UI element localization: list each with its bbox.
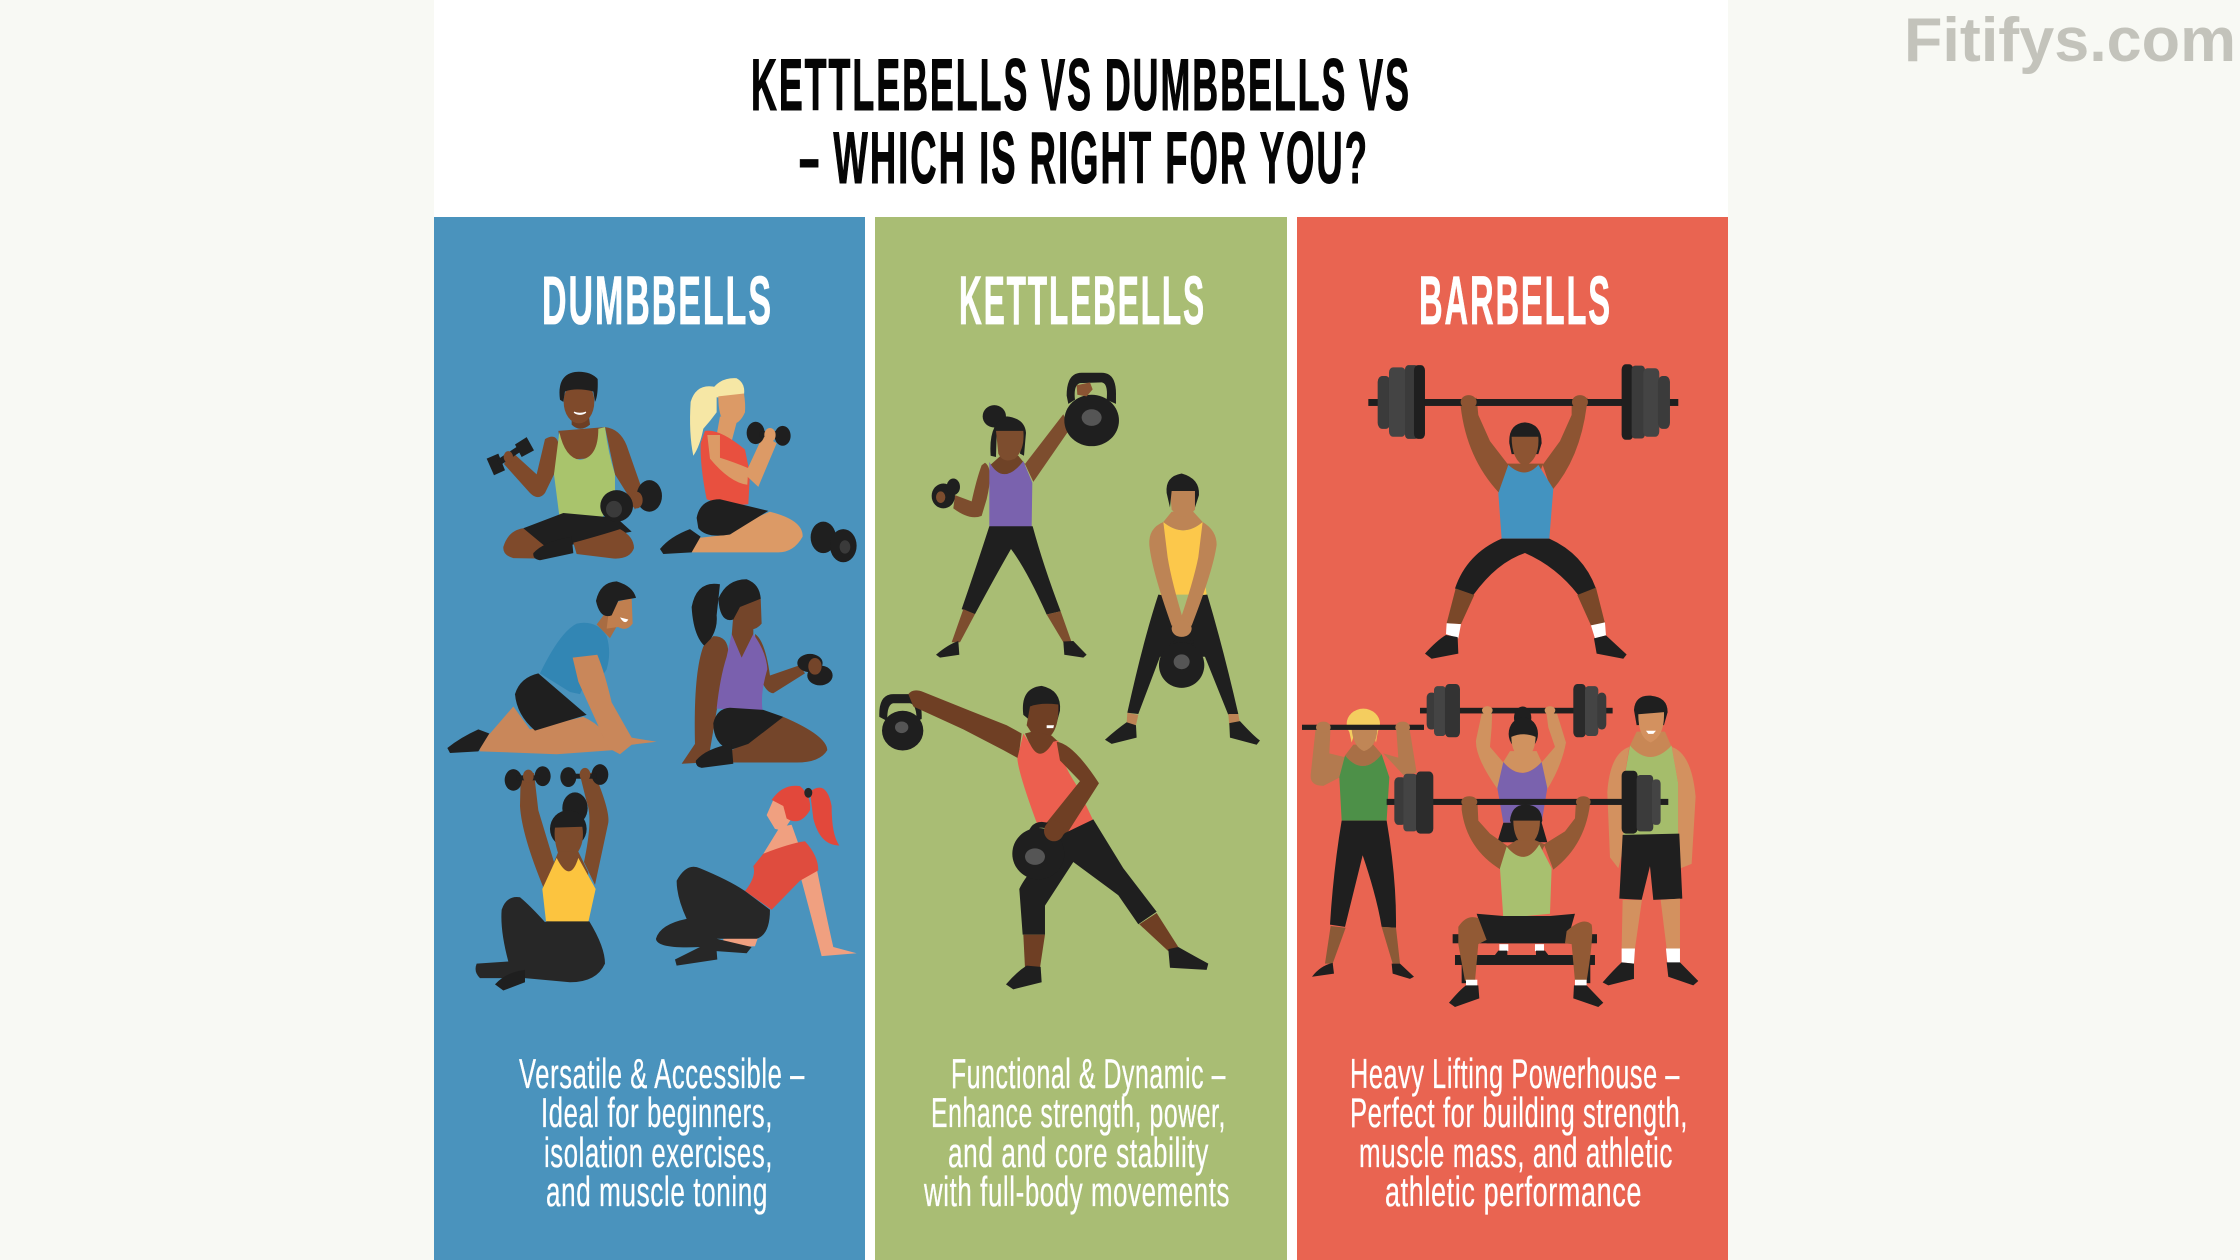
figure: kneeling blonde woman bbox=[660, 378, 857, 562]
figure: man leaning in blue tee bbox=[447, 581, 657, 754]
description: kettlebells: and and core stability bbox=[948, 1129, 1209, 1176]
figure: woman in green tank with bar bbox=[1302, 709, 1424, 979]
description: dumbbells: isolation exercises, bbox=[544, 1129, 773, 1176]
infographic canvas: KETTLEBELLS VS DUMBBELLS VS bbox=[751, 45, 1411, 126]
description: barbells: Perfect for building strength, bbox=[1350, 1089, 1688, 1136]
figure: seated man in green tank bbox=[487, 372, 662, 560]
description: dumbbells: Ideal for beginners, bbox=[541, 1089, 773, 1136]
description: kettlebells: Enhance strength, power, bbox=[931, 1089, 1226, 1136]
panel: barbells bbox=[1297, 217, 1728, 1260]
panel: kettlebells bbox=[875, 217, 1287, 1260]
panel: kettlebells: KETTLEBELLS bbox=[959, 262, 1206, 339]
figure: woman in purple tank behind bbox=[1420, 684, 1613, 823]
panel: dumbbells: DUMBBELLS bbox=[542, 262, 773, 339]
description: kettlebells: with full-body movements bbox=[923, 1168, 1230, 1215]
description: dumbbells bbox=[519, 1050, 805, 1215]
figure: man in yellow tank with two-hand kettlebell bbox=[1105, 474, 1260, 745]
description: kettlebells bbox=[923, 1050, 1230, 1215]
title: – WHICH IS RIGHT FOR YOU? bbox=[799, 118, 1369, 199]
figure: man in light green tank standing bbox=[1603, 696, 1698, 985]
description: barbells bbox=[1350, 1050, 1688, 1215]
illustration: people exercising with dumbbells bbox=[447, 372, 857, 991]
illustration: people lifting barbells bbox=[1302, 364, 1698, 1007]
figure: man in blue tank lifting barbell bbox=[1368, 364, 1678, 659]
figure: woman in purple tank raising kettlebell bbox=[932, 373, 1119, 658]
description: dumbbells: Versatile & Accessible – bbox=[519, 1050, 805, 1097]
figure: man in green tank squatting over bench with barbell bbox=[1387, 771, 1668, 1007]
description: barbells: muscle mass, and athletic bbox=[1359, 1129, 1673, 1176]
panel: barbells: BARBELLS bbox=[1419, 262, 1612, 339]
description: barbells: Heavy Lifting Powerhouse – bbox=[1350, 1050, 1680, 1097]
illustration: people exercising with kettlebells bbox=[879, 373, 1260, 989]
description: dumbbells: and muscle toning bbox=[546, 1168, 768, 1215]
watermark: Fitifys.com bbox=[1904, 6, 2236, 75]
figure: woman in purple tank with ponytail bbox=[682, 579, 833, 768]
panel: dumbbells bbox=[434, 217, 865, 1260]
figure: woman in coral tank lunging with kettlebells bbox=[879, 686, 1208, 989]
title bbox=[751, 45, 1411, 199]
figure: red-haired woman reclining bbox=[656, 786, 857, 966]
description: kettlebells: Functional & Dynamic – bbox=[951, 1050, 1226, 1097]
figure: woman in yellow top with dumbbells overhead bbox=[476, 764, 608, 991]
description: barbells: athletic performance bbox=[1385, 1168, 1642, 1215]
